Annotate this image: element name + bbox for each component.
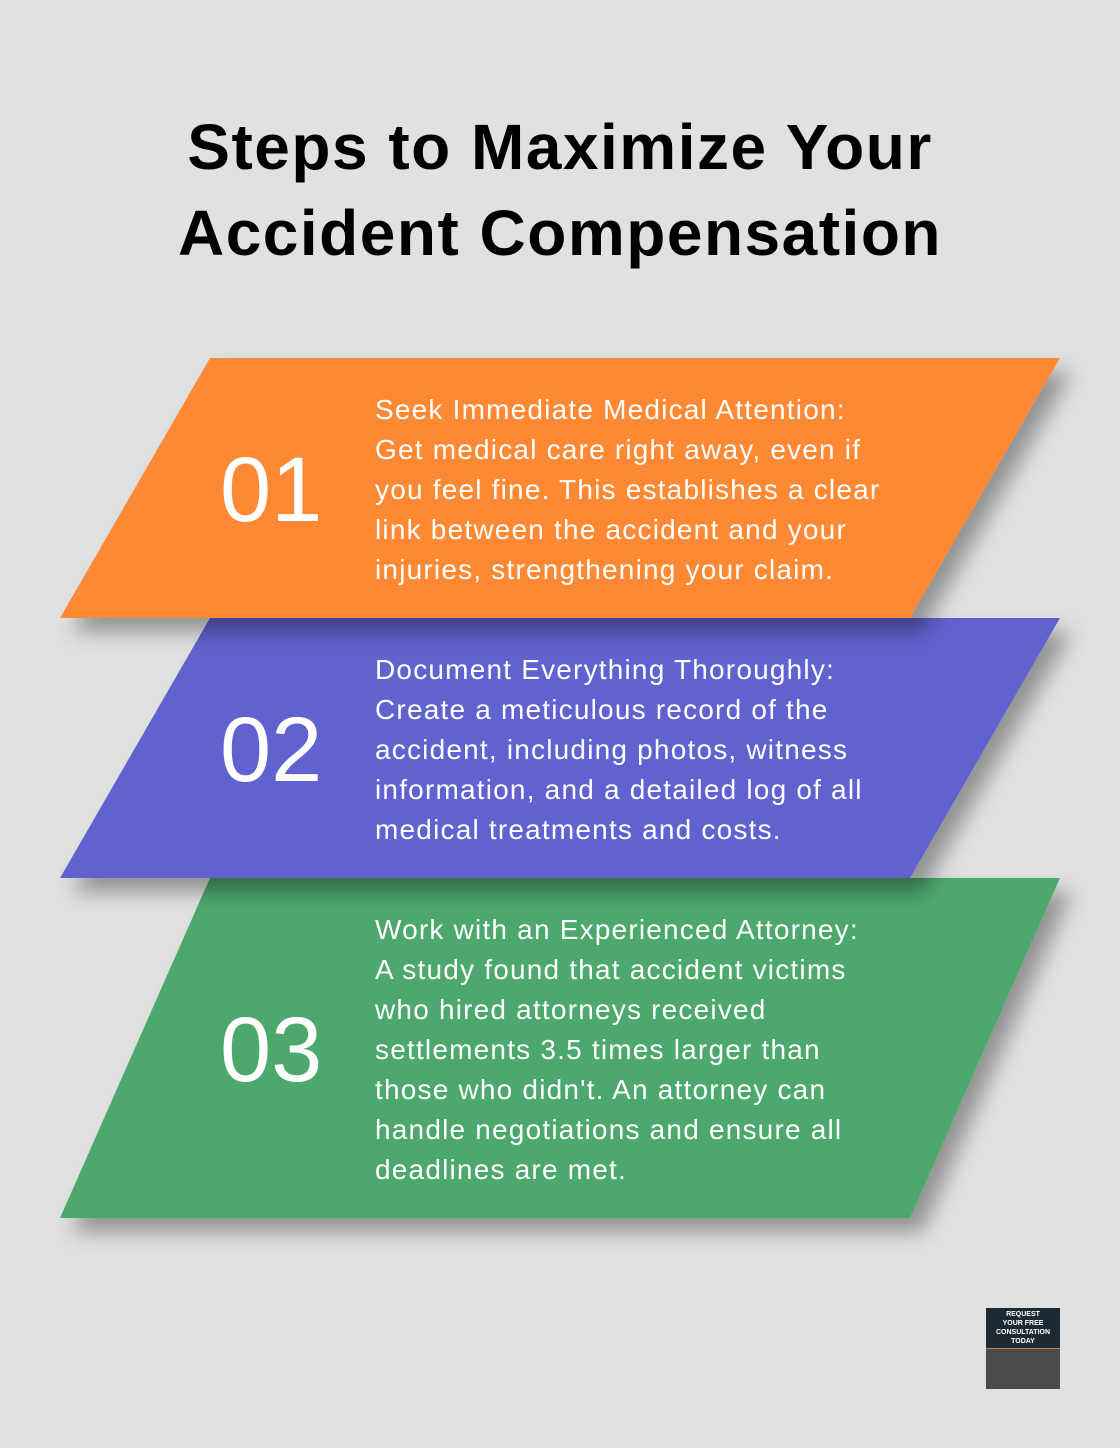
panel 1	[60, 358, 1060, 618]
number 01: 01	[220, 439, 322, 541]
number 03: 03	[220, 999, 322, 1101]
logo badge: CONSULTATION	[996, 1329, 1050, 1336]
text 3	[375, 914, 859, 1185]
text 1: you feel fine. This establishes a clear	[375, 474, 880, 505]
text 1: injuries, strengthening your claim.	[375, 554, 834, 585]
text 3: who hired attorneys received	[375, 994, 767, 1025]
text 3: handle negotiations and ensure all	[375, 1114, 842, 1145]
text 2: Create a meticulous record of the	[375, 694, 829, 725]
text 3: Work with an Experienced Attorney:	[375, 914, 859, 945]
text 2: medical treatments and costs.	[375, 814, 782, 845]
text 3: deadlines are met.	[375, 1154, 627, 1185]
panel 3	[60, 878, 1060, 1218]
number 02: 02	[220, 699, 322, 801]
text 1: link between the accident and your	[375, 514, 847, 545]
text 1: Seek Immediate Medical Attention:	[375, 394, 846, 425]
title: Steps to Maximize Your	[187, 111, 933, 183]
text 2: Document Everything Thoroughly:	[375, 654, 835, 685]
logo badge: REQUEST	[1006, 1311, 1040, 1318]
text 3: A study found that accident victims	[375, 954, 847, 985]
logo badge: TODAY	[1011, 1338, 1035, 1345]
text 2	[375, 654, 863, 845]
panel 2	[60, 618, 1060, 878]
logo badge: YOUR FREE	[1003, 1320, 1043, 1327]
text 1	[375, 394, 880, 585]
title	[178, 111, 942, 269]
title: Accident Compensation	[178, 197, 942, 269]
text 1: Get medical care right away, even if	[375, 434, 861, 465]
text 2: accident, including photos, witness	[375, 734, 848, 765]
text 3: settlements 3.5 times larger than	[375, 1034, 821, 1065]
text 3: those who didn't. An attorney can	[375, 1074, 826, 1105]
logo badge	[986, 1308, 1060, 1388]
text 2: information, and a detailed log of all	[375, 774, 863, 805]
